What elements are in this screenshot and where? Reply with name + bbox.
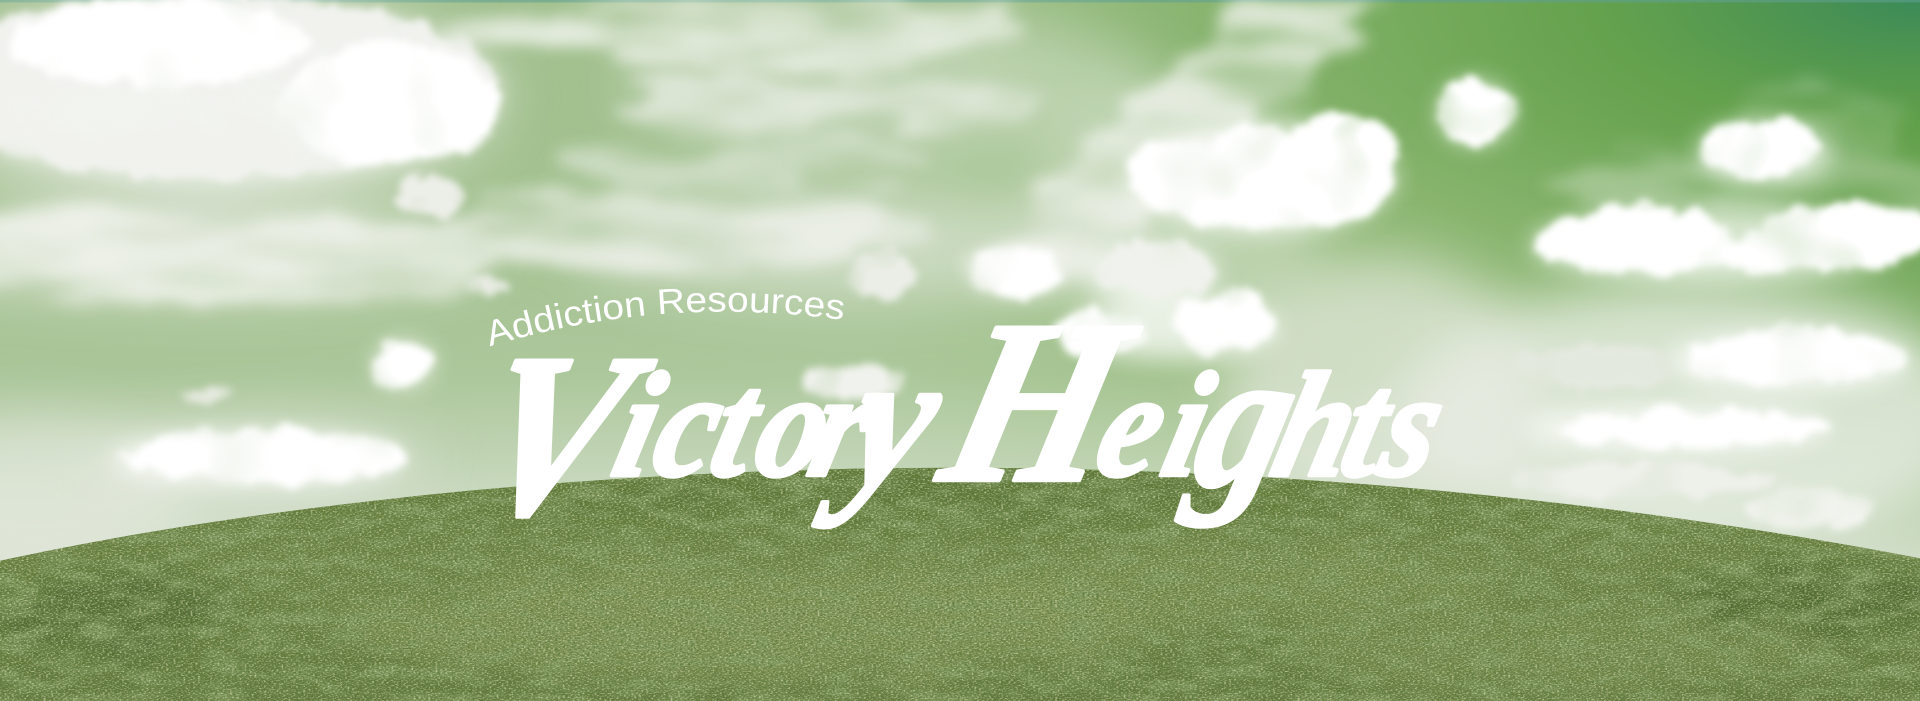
wispy cirrus streaks <box>0 0 1920 304</box>
grass hill <box>0 459 1920 701</box>
small clouds <box>122 81 1920 528</box>
title word: Victory: V <box>452 305 671 564</box>
clouds <box>0 0 1920 528</box>
title word: Victory: y <box>812 311 963 528</box>
title word: Heights: H <box>921 272 1156 531</box>
cloud halos <box>0 6 1910 486</box>
title <box>452 272 1478 564</box>
title word: Heights: ei <box>1083 343 1227 508</box>
title word: Heights: g <box>1173 311 1319 528</box>
cloud: large top left <box>0 0 500 216</box>
title word: Victory: ictor <box>600 343 891 508</box>
subtitle: Addiction Resources <box>490 288 844 346</box>
cloud: centre right <box>1127 113 1402 230</box>
grass: lighter and darker patches <box>0 479 1920 686</box>
title word: Heights: hts <box>1259 343 1461 508</box>
